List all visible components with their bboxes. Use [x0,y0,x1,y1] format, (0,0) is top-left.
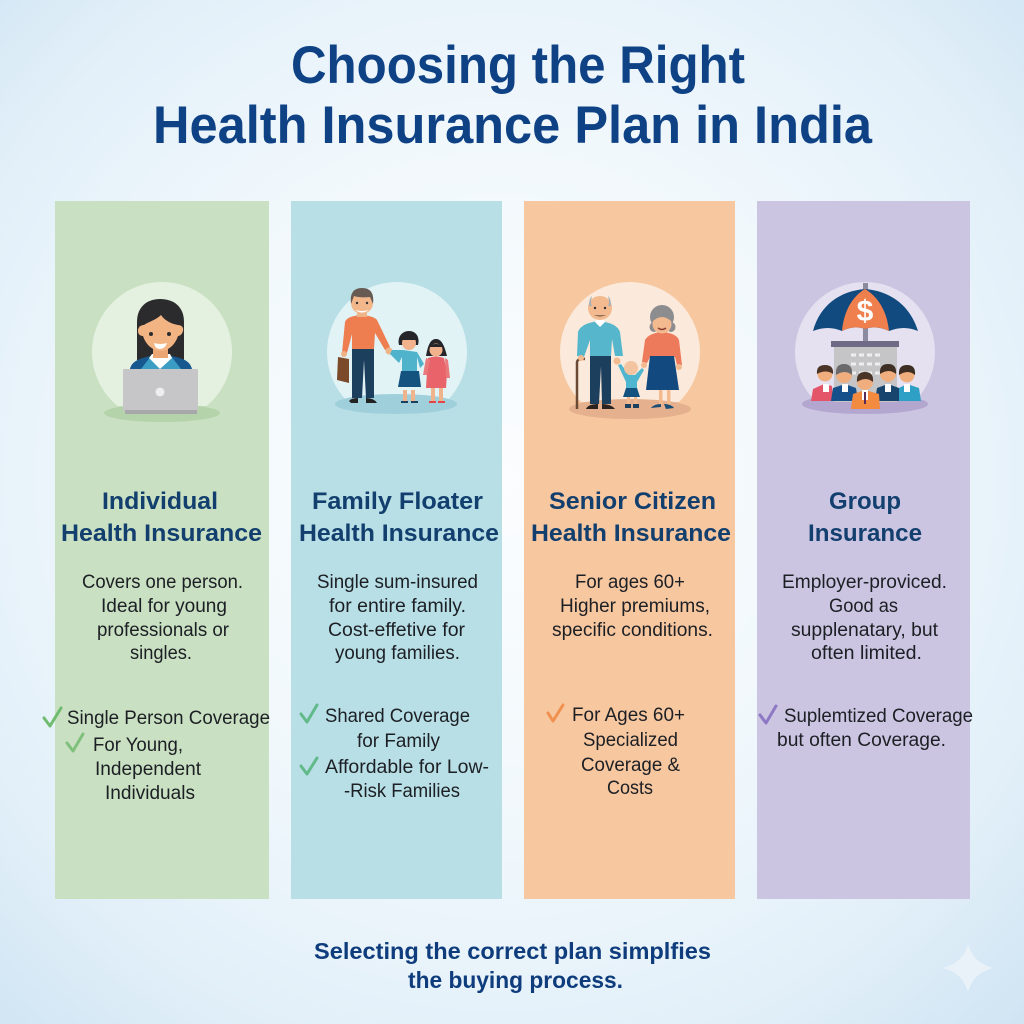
text: group insurance description: often limited. [811,643,922,664]
list: individual benefits: Independent [95,759,202,780]
icon: umbrella over employees [795,282,935,414]
text: family floater description: Single sum-insured [317,572,478,593]
list: group insurance benefits: Suplemtized Coverage [784,706,973,727]
text: senior citizen description: Higher premiums, [560,596,710,617]
text: individual description: Ideal for young [101,596,227,617]
text: individual description [82,572,243,664]
text: senior citizen description [552,572,713,641]
text: family floater description: Cost-effetive for [328,620,466,641]
list: group insurance benefits: but often Coverage. [777,730,946,751]
panel: individual health insurance [44,201,270,899]
heading: senior citizen [531,488,731,547]
heading: family floater [299,488,499,547]
footer message: the buying process. [408,967,623,993]
list: family floater benefits: Affordable for Low- [325,757,489,778]
list: family floater benefits: Shared Coverage [325,706,470,727]
text: family floater description: for entire family. [329,596,466,617]
list: individual benefits: Single Person Coverage [67,708,270,729]
text: individual description: singles. [130,643,192,664]
title: Choosing the Right [291,36,745,95]
heading: individual [61,488,262,547]
text: senior citizen description: specific conditions. [552,620,713,641]
panel: family floater health insurance [291,201,502,899]
list: individual benefits: Individuals [105,783,195,804]
list: senior citizen benefits: Specialized [583,730,678,751]
heading: group insurance: Group [829,488,901,515]
heading: family floater: Health Insurance [299,520,499,547]
footer message [314,938,711,993]
text: group insurance description: supplenatary, but [791,620,939,641]
heading: group insurance [808,488,922,547]
text: individual description: Covers one person. [82,572,243,593]
list: senior citizen benefits: Coverage & [581,755,680,776]
panel: group insurance [757,201,973,899]
title: Health Insurance Plan in India [153,96,872,155]
icon: grandparents with grandchild [560,282,700,419]
list: senior citizen benefits: For Ages 60+ [572,705,685,726]
heading: individual: Individual [102,488,218,515]
panel: senior citizen health insurance [524,201,735,899]
list: senior citizen benefits: Costs [607,778,653,799]
text: family floater description [317,572,478,664]
icon: sparkle [943,944,993,992]
icon: umbrella over employees: $ [857,295,874,328]
heading: individual: Health Insurance [61,520,262,547]
list: family floater benefits: -Risk Families [344,781,460,802]
title [153,36,872,155]
text: senior citizen description: For ages 60+ [575,572,685,593]
footer message: Selecting the correct plan simplfies [314,938,711,964]
text: individual description: professionals or [97,620,230,641]
icon: father with two daughters [327,282,467,414]
heading: senior citizen: Senior Citizen [549,488,716,515]
text: group insurance description: Employer-proviced. [782,572,947,593]
text: family floater description: young families. [335,643,460,664]
list: family floater benefits [301,705,489,802]
heading: group insurance: Insurance [808,520,922,547]
icon: woman with laptop [92,282,232,422]
list: senior citizen benefits [548,705,685,799]
heading: senior citizen: Health Insurance [531,520,731,547]
list: group insurance benefits [760,706,973,751]
heading: family floater: Family Floater [312,488,483,515]
text: group insurance description: Good as [829,596,898,617]
list: individual benefits: For Young, [93,735,183,756]
list: family floater benefits: for Family [357,731,440,752]
text: group insurance description [782,572,947,664]
list: individual benefits [44,708,270,804]
